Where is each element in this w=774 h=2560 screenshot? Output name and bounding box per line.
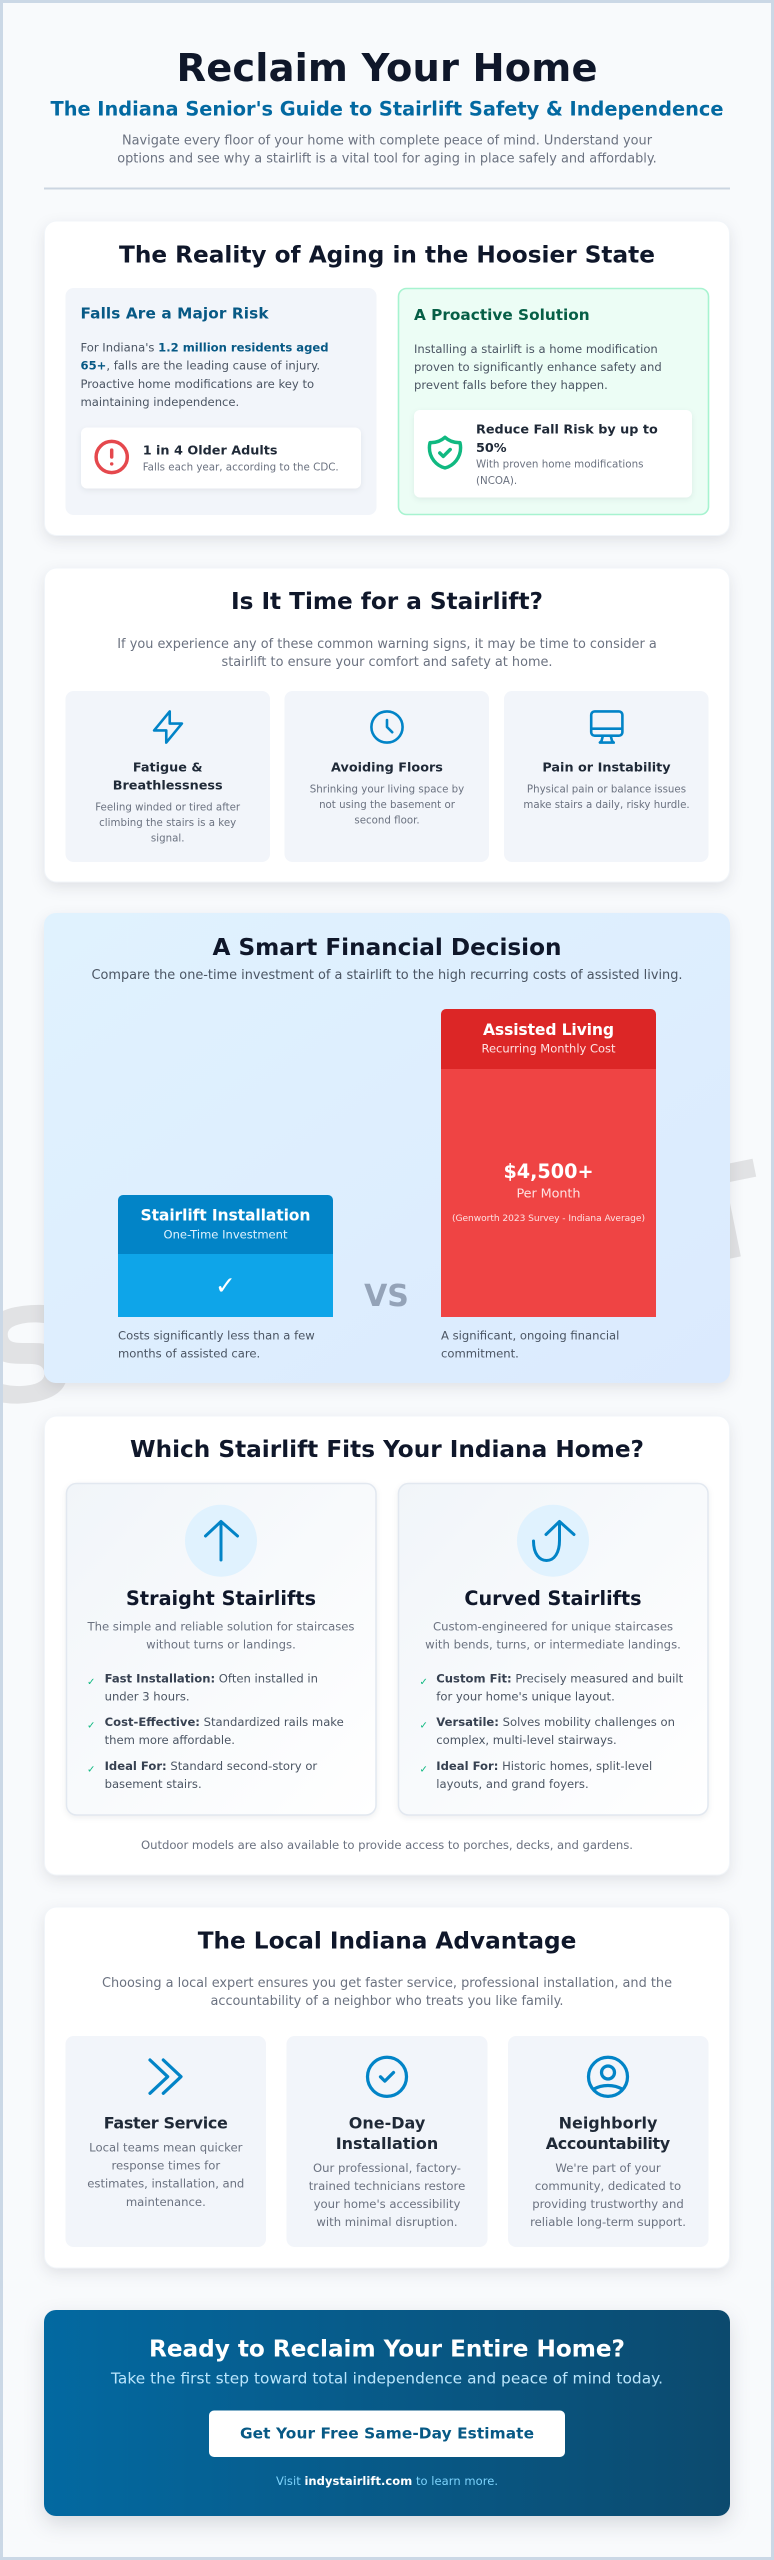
feature list xyxy=(87,1672,344,1791)
card text: community, dedicated to xyxy=(535,2179,681,2193)
caption: stairlift xyxy=(118,1328,315,1360)
card text: Local teams mean quicker xyxy=(89,2140,243,2154)
card text: maintenance. xyxy=(126,2195,206,2209)
card: curved stairlifts xyxy=(398,1484,708,1815)
card text xyxy=(414,342,662,392)
card: one-day installation xyxy=(286,2036,488,2247)
feature list: Ideal For: Historic homes, split-level xyxy=(436,1759,652,1773)
icon: alert xyxy=(96,441,127,473)
header xyxy=(50,46,724,166)
card title: Breathlessness xyxy=(113,778,223,794)
card title xyxy=(113,760,223,794)
feature list: layouts, and grand foyers. xyxy=(436,1777,589,1791)
card text xyxy=(310,784,464,826)
card text xyxy=(80,340,329,409)
card: straight stairlifts xyxy=(66,1484,376,1815)
heading: Which Stairlift Fits Your Indiana Home? xyxy=(130,1436,644,1463)
icon: clock xyxy=(371,711,403,743)
vs label: VS xyxy=(364,1279,409,1314)
feature list: ✓ xyxy=(420,1764,428,1776)
card title xyxy=(546,2114,671,2153)
feature list: ✓ xyxy=(420,1677,428,1688)
call to action xyxy=(44,2310,730,2516)
bar title: Assisted Living xyxy=(483,1021,614,1039)
card: falls risk xyxy=(66,288,376,515)
card text: proven to significantly enhance safety and xyxy=(414,360,662,374)
card text: prevent falls before they happen. xyxy=(414,378,608,392)
card: avoiding floors xyxy=(284,691,489,862)
card text: response times for xyxy=(111,2158,220,2172)
card text: trained technicians restore xyxy=(309,2179,465,2193)
card title: Curved Stairlifts xyxy=(464,1587,642,1610)
intro text: Navigate every floor of your home with complete peace of mind. Understand your xyxy=(122,134,653,148)
card text: providing trustworthy and xyxy=(532,2197,684,2211)
price: $4,500+ xyxy=(503,1160,594,1183)
feature list: Fast Installation: Often installed in xyxy=(105,1672,318,1686)
card title: Straight Stairlifts xyxy=(126,1587,316,1610)
card text: Shrinking your living space by xyxy=(310,784,464,796)
card heading: Falls Are a Major Risk xyxy=(80,304,269,322)
caption: stairlift: months of assisted care. xyxy=(118,1346,260,1360)
title: Reclaim Your Home xyxy=(176,46,598,91)
card text: Proactive home modifications are key to xyxy=(80,377,314,391)
card: faster service xyxy=(66,2036,266,2247)
feature list: them more affordable. xyxy=(105,1733,235,1747)
card text: estimates, installation, and xyxy=(87,2176,244,2190)
feature list: ✓ xyxy=(87,1720,95,1732)
intro text: Choosing a local expert ensures you get faster service, professional installation, and the xyxy=(102,1976,672,1991)
card text xyxy=(530,2161,686,2229)
feature list: under 3 hours. xyxy=(105,1690,190,1704)
icon: curved arrow xyxy=(517,1505,589,1577)
card text: make stairs a daily, risky hurdle. xyxy=(523,799,690,811)
intro text: stairlift to ensure your comfort and safety at home. xyxy=(222,655,552,670)
card: pain xyxy=(504,691,708,862)
card heading: A Proactive Solution xyxy=(414,306,590,324)
card text: Feeling winded or tired after xyxy=(95,802,241,814)
card text xyxy=(95,802,241,844)
card text xyxy=(425,1620,681,1652)
card text: Our professional, factory- xyxy=(313,2161,461,2175)
card text: The simple and reliable solution for staircases xyxy=(86,1620,354,1634)
card text xyxy=(523,784,690,811)
card text xyxy=(87,2140,244,2209)
card text: Custom-engineered for unique staircases xyxy=(433,1620,673,1634)
stat note: Falls each year, according to the CDC. xyxy=(143,461,339,473)
bar subtitle: Recurring Monthly Cost xyxy=(482,1042,616,1056)
bar: stairlift installation xyxy=(118,1195,333,1317)
card: proactive solution xyxy=(398,288,708,514)
feature list: ✓ xyxy=(87,1764,95,1776)
stat note: With proven home modifications xyxy=(476,459,643,471)
card text: For Indiana's 1.2 million residents aged xyxy=(80,340,329,354)
subtitle: The Indiana Senior's Guide to Stairlift Safety & Independence xyxy=(50,98,724,120)
bar title: Stairlift Installation xyxy=(140,1206,310,1224)
card: fatigue xyxy=(66,691,270,862)
stat: reduce fall risk xyxy=(414,410,692,498)
heading: The Reality of Aging in the Hoosier State xyxy=(119,242,655,268)
card text: maintaining independence. xyxy=(80,395,239,409)
card text: with minimal disruption. xyxy=(316,2215,458,2229)
card text: We're part of your xyxy=(555,2161,661,2175)
intro text xyxy=(102,1976,672,2009)
website note: Visit indystairlift.com to learn more. xyxy=(276,2474,498,2488)
card title: Installation xyxy=(336,2134,438,2153)
panel: which stairlift xyxy=(44,1416,730,1875)
intro text: accountability of a neighbor who treats you like family. xyxy=(210,1994,564,2009)
stat title: 50% xyxy=(476,441,507,456)
stat note xyxy=(476,459,643,487)
stat title: 1 in 4 Older Adults xyxy=(143,443,278,458)
card title: Faster Service xyxy=(104,2114,228,2132)
feature list xyxy=(420,1672,684,1791)
stat title xyxy=(476,423,658,456)
feature list: complex, multi-level stairways. xyxy=(436,1733,617,1747)
button xyxy=(209,2410,565,2457)
card text: climbing the stairs is a key xyxy=(99,817,236,829)
card title: Neighborly xyxy=(559,2114,658,2132)
intro text xyxy=(117,134,657,166)
button: Get Your Free Same-Day Estimate xyxy=(240,2424,534,2442)
feature list: basement stairs. xyxy=(105,1777,202,1791)
feature list: for your home's unique layout. xyxy=(436,1690,615,1704)
icon: user circle xyxy=(589,2057,628,2096)
panel: reality of aging xyxy=(44,221,730,536)
heading: The Local Indiana Advantage xyxy=(198,1928,576,1954)
caption: assisted living: A significant, ongoing financial xyxy=(441,1328,619,1342)
cta heading: Ready to Reclaim Your Entire Home? xyxy=(149,2336,625,2363)
panel: warning signs xyxy=(44,568,730,882)
source note: (Genworth 2023 Survey - Indiana Average) xyxy=(452,1214,645,1224)
card title: Avoiding Floors xyxy=(331,760,443,776)
icon: check: ✓ xyxy=(215,1271,236,1300)
icon: shield xyxy=(429,437,461,468)
stat: 1 in 4 xyxy=(81,428,361,488)
feature list: Ideal For: Standard second-story or xyxy=(105,1759,317,1773)
stat title: Reduce Fall Risk by up to xyxy=(476,423,658,438)
feature list: Cost-Effective: Standardized rails make xyxy=(105,1715,344,1729)
bar: assisted living xyxy=(441,1009,656,1317)
heading: Is It Time for a Stairlift? xyxy=(231,588,543,615)
icon: chevrons xyxy=(150,2060,181,2093)
icon: monitor xyxy=(591,711,622,743)
panel: local advantage xyxy=(44,1907,730,2268)
footnote: Outdoor models are also available to provide access to porches, decks, and gardens. xyxy=(141,1838,633,1852)
card text: Installing a stairlift is a home modification xyxy=(414,342,658,356)
intro text: If you experience any of these common warning signs, it may be time to consider a xyxy=(117,637,657,652)
icon: straight arrow xyxy=(185,1505,257,1577)
card text: with bends, turns, or intermediate landings. xyxy=(425,1638,681,1652)
card text: signal. xyxy=(151,832,184,844)
stat note: (NCOA). xyxy=(476,475,517,487)
panel: financial decision xyxy=(44,913,730,1383)
card text: not using the basement or xyxy=(319,799,456,811)
feature list: ✓ xyxy=(420,1720,428,1732)
caption: assisted living xyxy=(441,1328,619,1360)
card title: Fatigue & xyxy=(133,760,203,776)
card text xyxy=(309,2161,465,2229)
card: neighborly accountability xyxy=(508,2036,708,2247)
card text: reliable long-term support. xyxy=(530,2215,686,2229)
card title: Accountability xyxy=(546,2134,671,2153)
card text: without turns or landings. xyxy=(146,1638,296,1652)
card text: 65+, falls are the leading cause of injury. xyxy=(80,359,320,373)
caption: stairlift: Costs significantly less than a few xyxy=(118,1328,315,1342)
feature list: Custom Fit: Precisely measured and built xyxy=(436,1672,684,1686)
card text: your home's accessibility xyxy=(314,2197,461,2211)
card text xyxy=(86,1620,354,1652)
intro text xyxy=(117,637,657,670)
bar subtitle: One-Time Investment xyxy=(164,1228,288,1242)
card title xyxy=(336,2114,438,2153)
heading: A Smart Financial Decision xyxy=(212,934,562,961)
card title: Pain or Instability xyxy=(542,760,671,776)
intro text: Compare the one-time investment of a stairlift to the high recurring costs of assisted living. xyxy=(92,968,682,983)
feature list: ✓ xyxy=(87,1677,95,1688)
card text: second floor. xyxy=(354,814,420,826)
card text: Physical pain or balance issues xyxy=(527,784,686,796)
icon: lightning xyxy=(154,711,182,743)
feature list: Versatile: Solves mobility challenges on xyxy=(436,1715,675,1729)
cta text: Take the first step toward total independence and peace of mind today. xyxy=(110,2370,663,2388)
price unit: Per Month xyxy=(516,1186,580,1202)
caption: assisted living: commitment. xyxy=(441,1346,519,1360)
card title: One-Day xyxy=(349,2114,426,2132)
intro text: options and see why a stairlift is a vital tool for aging in place safely and affordably. xyxy=(117,152,657,166)
icon: check circle xyxy=(368,2057,407,2096)
